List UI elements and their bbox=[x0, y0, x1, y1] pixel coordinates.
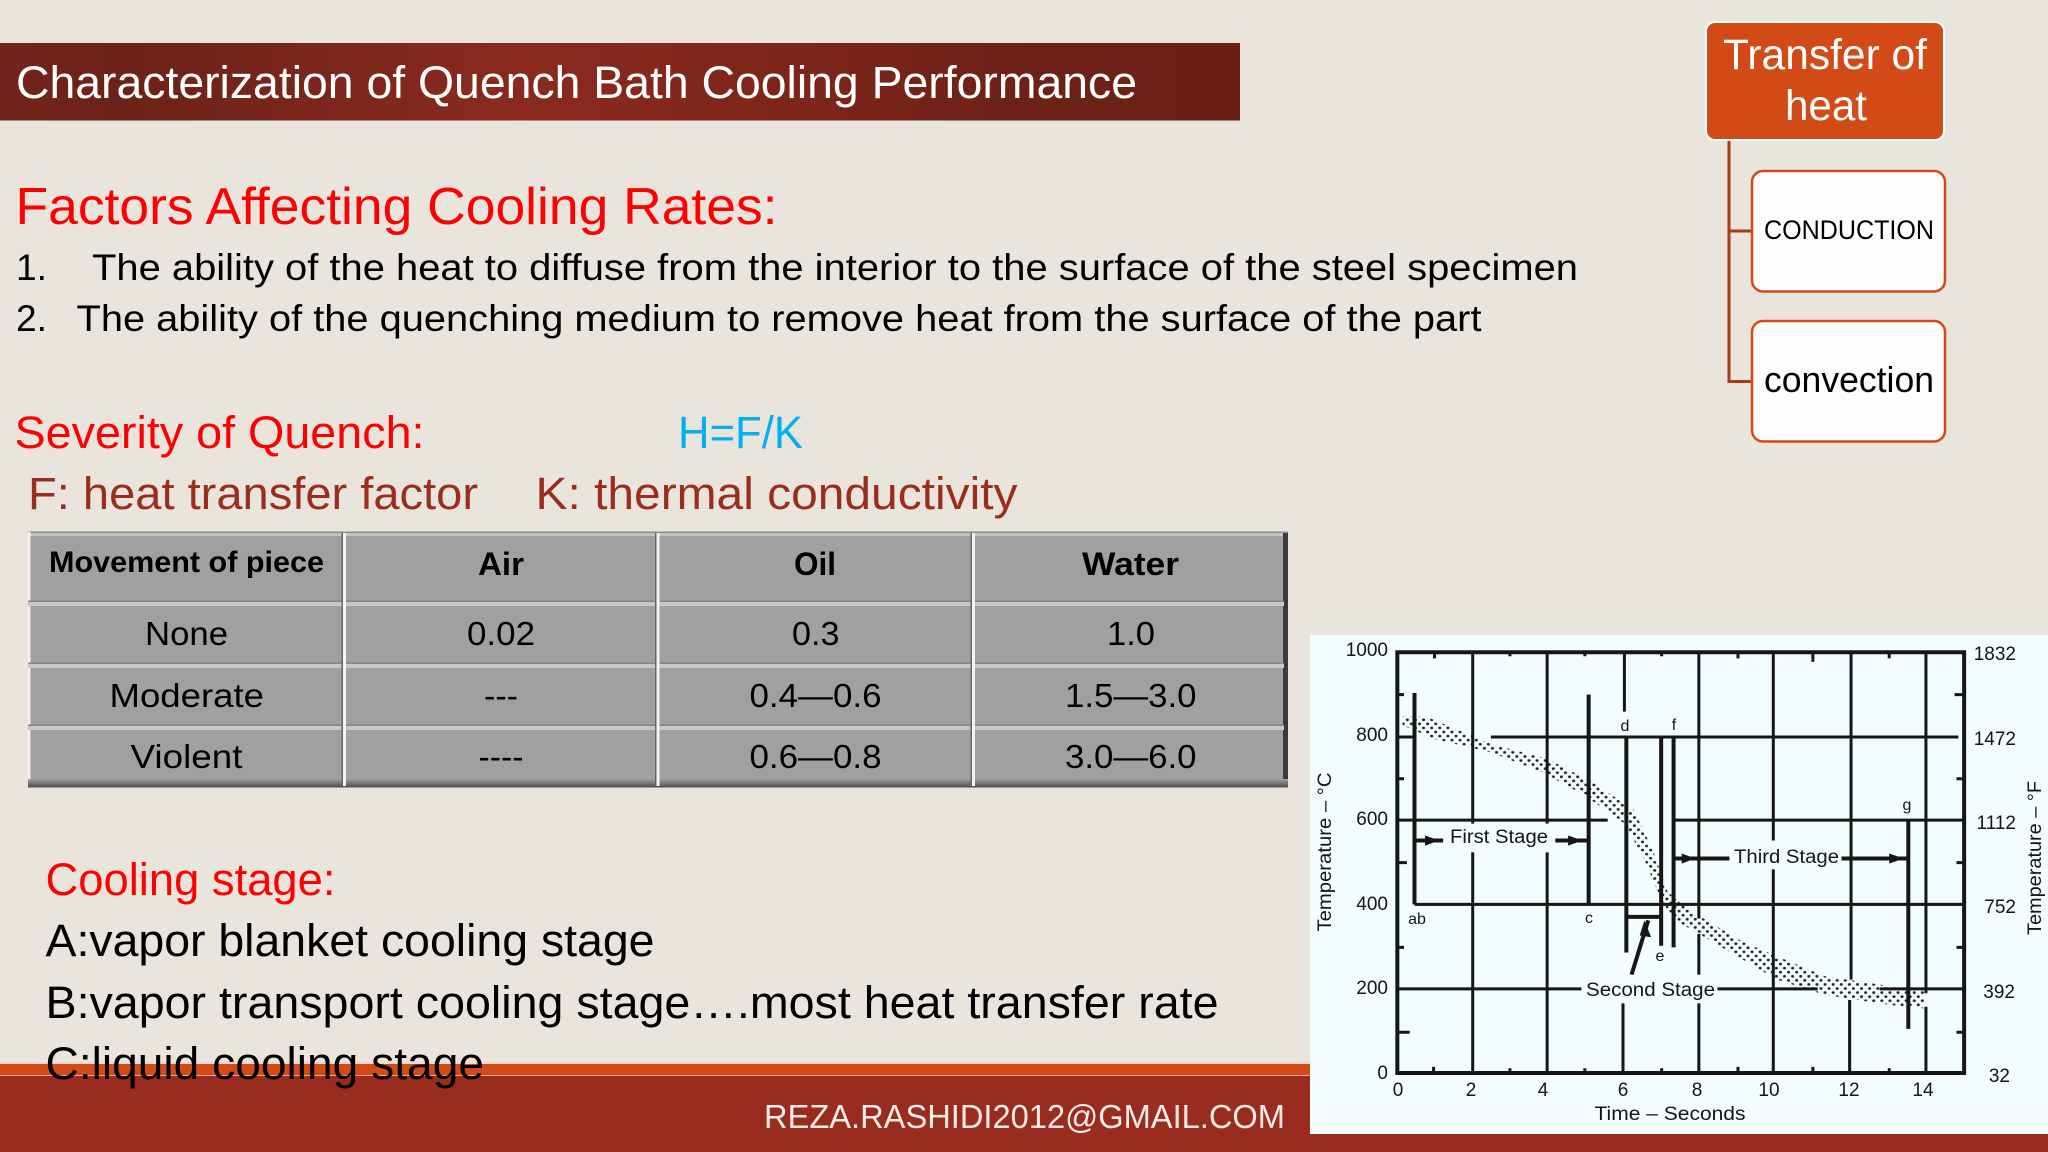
box: conduction bbox=[1752, 171, 1945, 292]
time axis labels: 10 bbox=[1758, 1080, 1780, 1101]
right temperature axis labels bbox=[1974, 644, 2016, 1087]
text block: factors list: The ability of the heat to diffuse from the interior to the surface of the steel specimen bbox=[92, 247, 1578, 288]
text block: formula definitions bbox=[28, 468, 1018, 519]
table row: moderate: --- bbox=[484, 677, 518, 714]
box: convection bbox=[1752, 321, 1945, 442]
text block: factors list: The ability of the quenching medium to remove heat from the surface of the part bbox=[76, 298, 1482, 339]
table row: none: 1.0 bbox=[1107, 615, 1155, 652]
table row: moderate: Moderate bbox=[110, 677, 264, 714]
curve point letters: ab bbox=[1408, 911, 1426, 928]
text block: factors list bbox=[16, 247, 1578, 339]
stage labels: Third Stage bbox=[1734, 847, 1839, 868]
curve point letters: c bbox=[1585, 910, 1593, 927]
left temperature axis labels: 0 bbox=[1377, 1063, 1388, 1084]
table row: violent: 3.0—6.0 bbox=[1065, 738, 1196, 775]
left temperature axis labels: 1000 bbox=[1346, 640, 1388, 661]
table row: moderate: 0.4—0.6 bbox=[750, 677, 882, 714]
text block: cooling stages: A:vapor blanket cooling stage bbox=[46, 915, 654, 966]
chart: quench cooling curve bbox=[1310, 635, 2048, 1134]
table header row: Air bbox=[478, 546, 524, 582]
time axis labels: 14 bbox=[1912, 1080, 1934, 1101]
curve point letters: d bbox=[1621, 718, 1629, 735]
curve point letters: e bbox=[1656, 948, 1665, 965]
text block: formula definitions: F: heat transfer factor bbox=[28, 468, 478, 519]
plot grid and stage markers bbox=[1397, 652, 1964, 1073]
left temperature axis labels: 600 bbox=[1356, 809, 1388, 830]
connector lines bbox=[1729, 140, 1752, 382]
text block: formula definitions: K: thermal conductivity bbox=[536, 468, 1018, 519]
box: transfer of heat: Transfer of bbox=[1723, 31, 1928, 79]
left temperature axis labels: 200 bbox=[1356, 978, 1388, 999]
table row: moderate bbox=[110, 677, 1196, 714]
right temperature axis labels: 1832 bbox=[1974, 644, 2016, 665]
text block: factors list: 2. bbox=[16, 298, 47, 339]
right axis title: Temperature – °F bbox=[2025, 781, 2046, 935]
left temperature axis labels: 800 bbox=[1356, 725, 1388, 746]
hierarchy diagram: transfer of heat bbox=[1706, 22, 1945, 442]
time axis labels: 2 bbox=[1466, 1080, 1476, 1101]
table row: violent: 0.6—0.8 bbox=[750, 738, 882, 775]
time axis labels: 12 bbox=[1838, 1080, 1860, 1101]
time axis labels: 6 bbox=[1618, 1080, 1628, 1101]
left temperature axis labels bbox=[1346, 640, 1388, 1084]
time axis labels: 0 bbox=[1393, 1080, 1403, 1101]
cooling curve band bbox=[1403, 717, 1925, 1008]
curve point letters: f bbox=[1672, 717, 1677, 734]
box: convection: convection bbox=[1764, 359, 1934, 400]
footer email: REZA.RASHIDI2012@GMAIL.COM bbox=[764, 1098, 1285, 1135]
box: conduction: CONDUCTION bbox=[1764, 215, 1934, 245]
table header row: Water bbox=[1082, 546, 1179, 582]
title banner bbox=[0, 43, 1240, 120]
table row: none: None bbox=[145, 615, 228, 652]
table row: violent: Violent bbox=[130, 738, 242, 775]
formula: H=F/K bbox=[678, 407, 803, 458]
right temperature axis labels: 1112 bbox=[1977, 813, 2016, 834]
time axis labels: 4 bbox=[1538, 1080, 1549, 1101]
stage labels bbox=[1450, 827, 1839, 1001]
right temperature axis labels: 392 bbox=[1983, 982, 2015, 1003]
table row: moderate: 1.5—3.0 bbox=[1065, 677, 1196, 714]
heading: cooling stage: Cooling stage: bbox=[46, 854, 336, 905]
title banner: Characterization of Quench Bath Cooling Performance bbox=[16, 57, 1137, 108]
time axis labels: 8 bbox=[1692, 1080, 1702, 1101]
table row: violent bbox=[130, 738, 1196, 775]
table row: none: 0.02 bbox=[467, 615, 535, 652]
curve point letters bbox=[1408, 717, 1911, 965]
stage labels: Second Stage bbox=[1586, 980, 1715, 1001]
table header row bbox=[49, 546, 1179, 582]
right temperature axis labels: 32 bbox=[1989, 1066, 2010, 1087]
table header row: Oil bbox=[794, 546, 836, 582]
text block: factors list: 1. bbox=[16, 247, 47, 288]
footer band bbox=[0, 1062, 2048, 1152]
text block: cooling stages: B:vapor transport cooling stage….most heat transfer rate bbox=[46, 977, 1218, 1028]
box: transfer of heat: heat bbox=[1785, 82, 1867, 130]
right temperature axis labels: 752 bbox=[1984, 897, 2016, 918]
box: transfer of heat bbox=[1706, 22, 1944, 140]
right temperature axis labels: 1472 bbox=[1974, 729, 2016, 750]
text block: cooling stages bbox=[46, 915, 1218, 1089]
curve point letters: g bbox=[1903, 797, 1911, 814]
table header row: Movement of piece bbox=[49, 546, 324, 579]
table row: none: 0.3 bbox=[792, 615, 840, 652]
heading: severity of quench: Severity of Quench: bbox=[14, 407, 424, 458]
text block: cooling stages: C:liquid cooling stage bbox=[46, 1038, 484, 1089]
time axis labels bbox=[1393, 1080, 1934, 1101]
stage labels: First Stage bbox=[1450, 827, 1548, 848]
table: quench severity by movement of piece bbox=[28, 532, 1288, 788]
table row: none bbox=[145, 615, 1155, 652]
x axis title: Time – Seconds bbox=[1594, 1104, 1746, 1125]
table row: violent: ---- bbox=[478, 738, 524, 775]
heading: factors affecting cooling rates: Factors Affecting Cooling Rates: bbox=[16, 178, 778, 236]
left axis title: Temperature – °C bbox=[1315, 772, 1336, 932]
left temperature axis labels: 400 bbox=[1356, 894, 1388, 915]
